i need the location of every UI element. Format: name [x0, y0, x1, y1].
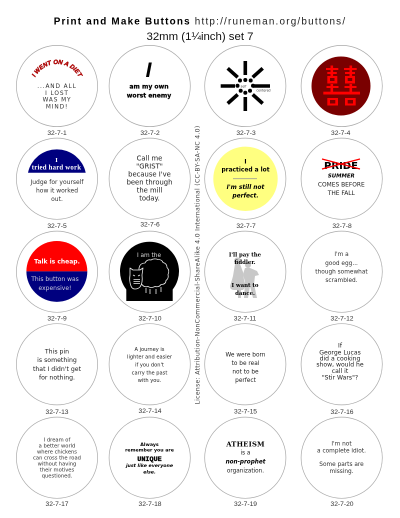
license text: License: Attribution-NonCommercial-ShareAlike 4.0 International (CC-BY-SA-NC 4.0) [194, 125, 202, 405]
button 32-7-14 [109, 324, 190, 415]
button 32-7-18: UNIQUE [137, 456, 162, 464]
button 32-7-15: perfect [235, 378, 257, 384]
button 32-7-8: PRIDE [324, 161, 358, 172]
button 32-7-16: 32-7-16 [330, 409, 354, 416]
button 32-7-16: If [338, 342, 343, 349]
button 32-7-3: self [241, 84, 247, 88]
button 32-7-17: where chickens [37, 449, 77, 455]
button 32-7-7: I [244, 160, 247, 166]
button 32-7-3: 32-7-3 [236, 130, 256, 137]
button 32-7-14: if you don't [135, 363, 164, 369]
button 32-7-4: 32-7-4 [331, 130, 351, 137]
title: Print and Make Buttons http://runeman.org/buttons/ [54, 16, 346, 28]
button 32-7-1: 32-7-1 [47, 130, 67, 137]
button 32-7-16: show, would he [316, 362, 364, 368]
button 32-7-13: This pin [44, 348, 69, 355]
button 32-7-2: am my own [129, 84, 169, 91]
button 32-7-7: practiced a lot [221, 168, 270, 174]
button 32-7-11: 32-7-11 [234, 316, 257, 322]
button 32-7-1: ...AND ALL [37, 84, 77, 90]
button 32-7-1: MIND! [46, 105, 68, 111]
button 32-7-18: 32-7-18 [138, 501, 162, 508]
button 32-7-6: Call me [137, 154, 162, 162]
button 32-7-7: I'm still not [227, 185, 265, 191]
button 32-7-14: 32-7-14 [138, 408, 162, 415]
button 32-7-18: remember you are [125, 448, 174, 454]
button 32-7-5: how it worked [36, 188, 78, 194]
button 32-7-16 [301, 324, 382, 416]
button 32-7-17: I dream of [44, 437, 70, 443]
button 32-7-8: 32-7-8 [332, 223, 352, 230]
button 32-7-6: the mill [137, 186, 162, 194]
button 32-7-7: 32-7-7 [236, 223, 256, 230]
icon: dancers silhouette [230, 258, 259, 298]
button 32-7-20: missing. [329, 469, 354, 475]
button 32-7-15: 32-7-15 [234, 408, 257, 416]
button 32-7-8: THE FALL [327, 191, 356, 197]
button 32-7-13: 32-7-13 [45, 409, 69, 416]
button 32-7-7 [205, 138, 286, 230]
button 32-7-12: good egg... [325, 261, 358, 267]
icon: self-centered sunburst [221, 61, 270, 111]
button 32-7-5: I [55, 157, 58, 164]
button 32-7-4 [301, 45, 382, 137]
button 32-7-6: today. [139, 194, 160, 202]
button 32-7-6: because I've [128, 170, 171, 178]
button 32-7-8 [301, 138, 382, 230]
button 32-7-19: ATHEISM [225, 441, 265, 449]
button 32-7-10: 32-7-10 [138, 316, 162, 322]
button 32-7-19 [205, 417, 286, 508]
button 32-7-16: George Lucas [319, 349, 361, 356]
button 32-7-17 [16, 417, 98, 508]
button 32-7-2: I [146, 59, 153, 82]
button 32-7-11: fiddler. [234, 260, 256, 266]
button 32-7-11: dance. [235, 291, 255, 297]
button 32-7-13: is something [37, 357, 77, 364]
button 32-7-15: We were born [226, 352, 266, 358]
button 32-7-16: call it [332, 368, 349, 375]
button 32-7-17: without having [38, 462, 76, 468]
button 32-7-12: scrambled. [325, 278, 358, 284]
button 32-7-20: a complete idiot. [317, 448, 366, 454]
button 32-7-17: questioned. [42, 473, 73, 479]
icon: black sheep [130, 259, 169, 294]
button 32-7-9: expensive! [39, 285, 71, 292]
button 32-7-13: that I didn't get [33, 366, 82, 373]
button 32-7-11: I want to [232, 283, 259, 289]
button 32-7-6 [109, 138, 190, 229]
button 32-7-14: A journey is [135, 347, 165, 353]
title: 32mm (1¼inch) set 7 [146, 31, 254, 43]
button 32-7-7: perfect. [231, 194, 259, 200]
button 32-7-8: SUMMER [328, 174, 355, 180]
button 32-7-9: Talk is cheap. [34, 258, 80, 265]
button 32-7-20: 32-7-20 [330, 501, 354, 508]
navy semicircle [28, 149, 86, 173]
button 32-7-1: I LOST [45, 91, 69, 97]
button 32-7-9 [16, 231, 98, 322]
button 32-7-3 [205, 45, 286, 137]
button 32-7-17: their motives [40, 467, 74, 473]
button 32-7-9: This button was [30, 276, 79, 283]
button 32-7-5: tried hard work [32, 164, 81, 172]
button 32-7-10: I am the [137, 253, 161, 259]
button 32-7-6: 32-7-6 [140, 222, 160, 229]
button 32-7-6: been through [127, 178, 172, 186]
button 32-7-13 [16, 324, 98, 416]
title [54, 16, 346, 43]
button 32-7-1: WAS MY [43, 98, 71, 104]
red cross-out [322, 159, 360, 169]
button 32-7-14: lighter and easier [127, 355, 173, 361]
button 32-7-17: a better world [39, 443, 75, 449]
button 32-7-12: 32-7-12 [330, 316, 354, 322]
button 32-7-19: non-prophet [226, 460, 266, 466]
button 32-7-15: not to be [232, 370, 259, 376]
button 32-7-13: for nothing. [39, 374, 75, 381]
button 32-7-1: I WENT ON A DIET [32, 60, 83, 78]
button 32-7-5 [16, 138, 98, 230]
button 32-7-11: I'll pay the [229, 252, 262, 258]
button 32-7-17: can cross the road [33, 456, 81, 462]
button 32-7-19: is a [241, 451, 250, 457]
button 32-7-12 [301, 231, 382, 322]
button 32-7-14: with you. [138, 378, 162, 384]
button 32-7-5: out. [51, 196, 63, 203]
button 32-7-20 [301, 417, 382, 508]
button 32-7-18: just like everyone [125, 463, 173, 469]
button 32-7-17: 32-7-17 [45, 501, 69, 508]
button 32-7-14: carry the past [132, 370, 167, 376]
button 32-7-18: else. [143, 469, 156, 475]
button 32-7-1 [16, 45, 98, 137]
button 32-7-2: 32-7-2 [140, 130, 160, 137]
button 32-7-20: I'm not [331, 441, 352, 447]
button 32-7-12: though somewhat [315, 270, 368, 276]
button 32-7-3: centered [256, 88, 271, 92]
button 32-7-10 [109, 231, 190, 322]
button 32-7-11 [205, 231, 286, 322]
button 32-7-5: 32-7-5 [47, 223, 67, 230]
button 32-7-8: COMES BEFORE [318, 183, 365, 189]
button 32-7-2 [109, 45, 190, 137]
button 32-7-18: Always [140, 442, 159, 448]
icon: double happiness [323, 66, 360, 106]
button 32-7-16: did a cooking [320, 356, 361, 363]
button 32-7-19: 32-7-19 [234, 501, 257, 508]
button 32-7-15 [205, 324, 286, 416]
button 32-7-18 [109, 417, 190, 508]
button 32-7-6: "GRIST" [136, 162, 163, 170]
button 32-7-2: worst enemy [127, 92, 171, 99]
button 32-7-20: Some parts are [319, 462, 364, 468]
button 32-7-15: to be real [232, 361, 260, 367]
button 32-7-19: organization. [227, 469, 264, 475]
button 32-7-5: Judge for yourself [29, 179, 84, 186]
button 32-7-12: I'm a [334, 252, 349, 258]
button 32-7-9: 32-7-9 [47, 316, 67, 322]
button 32-7-16: "Stir Wars"? [322, 374, 358, 382]
